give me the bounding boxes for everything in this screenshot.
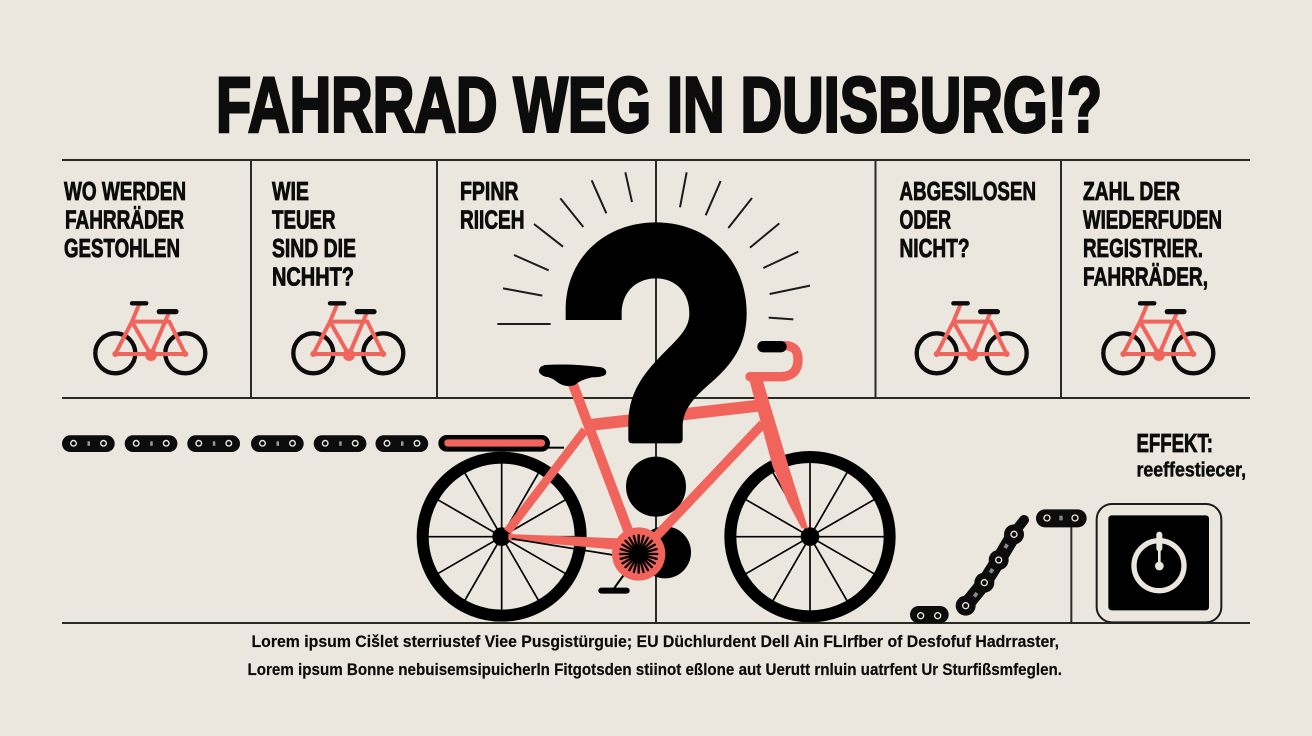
heading: wo werden: WO WERDEN <box>64 178 186 206</box>
icon: small bicycle 3 <box>917 303 1027 373</box>
icon: small bicycle 4 <box>1103 303 1213 373</box>
rear rack <box>438 435 564 452</box>
heading: abgesilosen: ODER <box>900 206 951 234</box>
central illustration: question mark and bicycle <box>423 172 890 616</box>
heading: wie teuer: TEUER <box>272 206 336 234</box>
radiating lines <box>497 172 810 324</box>
footer text: Lorem ipsum Bonne nebuisemsipuicherln Fitgotsden stiinot eßlone aut Uerutt rnluin uatrfent Ur Sturfißsmfeglen. <box>248 660 1062 679</box>
bicycle frame <box>507 346 808 550</box>
footer text: Lorem ipsum Cišlet sterriustef Viee Pusgistürguie; EU Düchlurdent Dell Ain FLlrfber of Desfofuf Hadrraster, <box>252 632 1059 651</box>
heading: wie teuer: SIND DIE <box>272 235 356 263</box>
icon: power button box <box>1097 504 1221 622</box>
icon: small bicycle 2 <box>293 303 403 373</box>
heading: wo werden: FAHRRÄDER <box>65 206 184 234</box>
panel: abgesilosen oder nicht <box>900 178 1043 373</box>
heading: abgesilosen: ABGESILOSEN <box>900 178 1036 206</box>
heading: fpinr riiceh: FPINR <box>460 178 518 206</box>
heading: zahl der: FAHRRÄDER, <box>1083 264 1208 292</box>
panel: wo werden fahrräder gestohlen <box>64 178 205 373</box>
panel: wie teuer <box>272 178 403 373</box>
question mark <box>566 222 747 517</box>
saddle <box>539 365 606 386</box>
chain line <box>512 539 613 555</box>
bicycle top tube <box>587 406 758 425</box>
heading: fpinr riiceh: RIICEH <box>460 206 524 234</box>
effekt text block <box>1136 430 1246 482</box>
effekt heading: EFFEKT: <box>1136 430 1213 458</box>
broken chain and power box <box>910 504 1221 623</box>
heading: wo werden: GESTOHLEN <box>64 235 180 263</box>
black crank disc <box>639 526 691 578</box>
heading: wie teuer: WIE <box>272 178 309 206</box>
panel: zahl der wiedergefundenen <box>1083 178 1229 373</box>
small chain link on ground <box>910 606 949 623</box>
icon: small bicycle 1 <box>95 303 205 373</box>
handlebar grip <box>763 330 781 364</box>
effekt subtext: reeffestiecer, <box>1136 460 1246 482</box>
front wheel <box>730 457 890 616</box>
heading: abgesilosen: NICHT? <box>900 235 970 263</box>
rising chain <box>956 520 1024 616</box>
heading: wie teuer: NCHHT? <box>272 264 354 292</box>
chainring <box>612 527 665 581</box>
heading: zahl der: REGISTRIER. <box>1083 235 1203 263</box>
chain link on post <box>1036 509 1087 622</box>
rear wheel <box>423 458 581 616</box>
heading: zahl der: WIEDERFUDEN <box>1083 206 1222 234</box>
kickstand and pedal <box>601 570 627 591</box>
chain links row <box>62 435 428 452</box>
heading: zahl der: ZAHL DER <box>1083 178 1180 206</box>
